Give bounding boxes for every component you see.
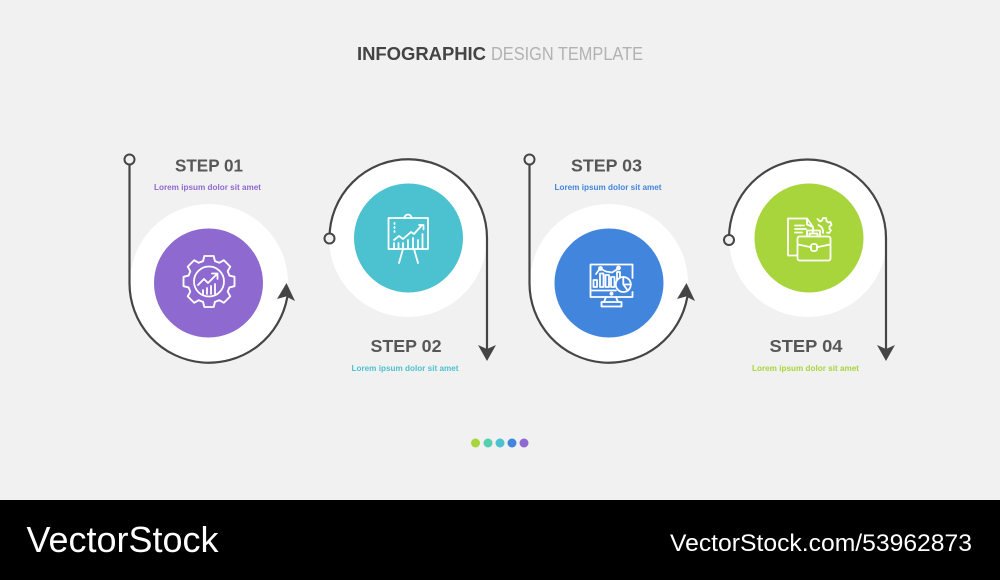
step 03 white disc [530, 204, 688, 362]
step 04 start dot [724, 235, 734, 245]
step 03 coloured circle [554, 228, 664, 338]
step 04 panel [724, 159, 895, 373]
step 02 white disc [329, 159, 487, 317]
step 01 heading: STEP 01 [175, 156, 243, 176]
icon: presentation board [388, 215, 428, 263]
pagination dots [471, 438, 528, 448]
footer brand: VectorStock [26, 519, 219, 560]
step 03 heading: STEP 03 [571, 156, 642, 176]
step 03 connector line [529, 165, 687, 363]
icon: document, gear and briefcase [788, 218, 832, 260]
step 03 start dot [524, 154, 534, 164]
step 01 start dot [124, 154, 134, 164]
step 01 text: Lorem ipsum dolor sit amet [154, 182, 261, 192]
step 03 text: Lorem ipsum dolor sit amet [554, 182, 662, 192]
step 02 coloured circle [354, 184, 463, 292]
step 04 coloured circle [754, 184, 864, 292]
step 01 arrowhead [277, 283, 295, 301]
step 01 connector line [129, 165, 287, 363]
step 04 white disc [729, 159, 887, 317]
step 04 text: Lorem ipsum dolor sit amet [752, 363, 859, 373]
step 03 arrowhead [677, 283, 695, 301]
step 02 text: Lorem ipsum dolor sit amet [352, 363, 459, 373]
step 04 heading: STEP 04 [770, 336, 843, 356]
title subtitle: DESIGN TEMPLATE [491, 43, 643, 64]
icon: gear with growth chart [184, 256, 234, 307]
step 04 connector line [729, 160, 886, 350]
step 02 connector line [330, 159, 487, 350]
footer bar [0, 500, 1000, 580]
step 02 panel [324, 159, 496, 373]
step 01 coloured circle [154, 228, 263, 338]
step 02 heading: STEP 02 [370, 336, 442, 356]
step 01 panel [124, 154, 295, 363]
title: INFOGRAPHIC [357, 43, 486, 64]
step 03 panel [524, 154, 695, 363]
icon: monitor with charts [590, 264, 632, 306]
footer image url: VectorStock.com/53962873 [670, 530, 972, 557]
step 04 arrowhead [877, 345, 895, 361]
step 02 arrowhead [478, 345, 496, 361]
step 02 start dot [324, 234, 334, 244]
step 01 white disc [130, 204, 288, 362]
